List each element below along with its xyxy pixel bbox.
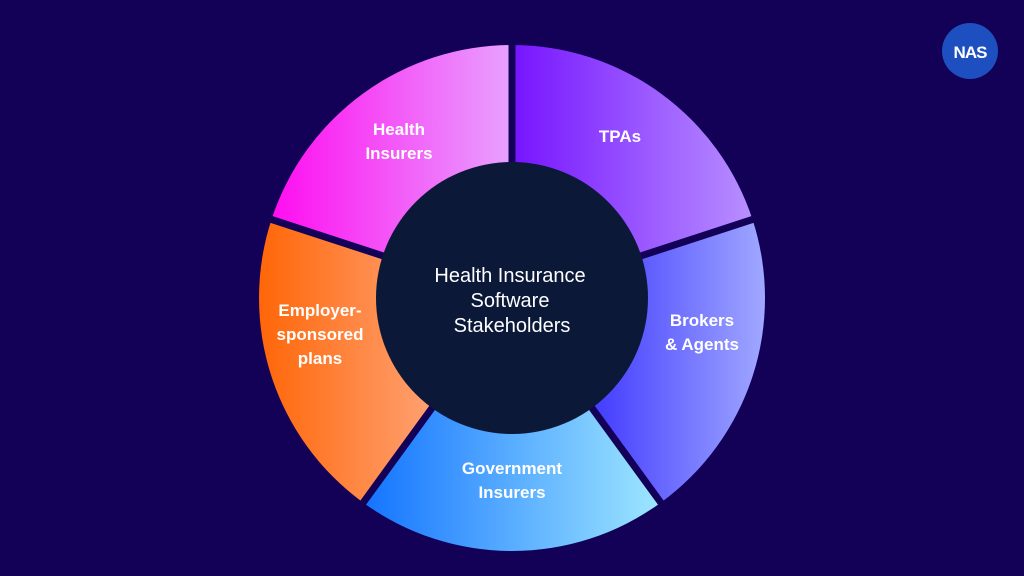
segment: Health Insurers: Insurers bbox=[365, 144, 433, 163]
segment: Brokers & Agents: & Agents bbox=[665, 335, 739, 354]
center circle title bbox=[376, 162, 648, 434]
segment: Employer-sponsored plans: Employer- bbox=[278, 301, 362, 320]
segment: Brokers & Agents: Brokers bbox=[670, 311, 734, 330]
center circle title: Stakeholders bbox=[454, 315, 570, 337]
center circle title: Software bbox=[471, 290, 549, 312]
segment: TPAs bbox=[512, 45, 753, 298]
segment: Employer-sponsored plans bbox=[259, 220, 512, 503]
segment: Government Insurers bbox=[363, 298, 661, 551]
segment: Health Insurers bbox=[271, 45, 512, 298]
segment: TPAs: TPAs bbox=[599, 127, 641, 146]
segment: Government Insurers: Insurers bbox=[478, 483, 546, 502]
logo: NAS bbox=[942, 23, 998, 79]
segment: Health Insurers: Health bbox=[373, 120, 425, 139]
donut chart bbox=[259, 40, 765, 551]
segment: Brokers & Agents bbox=[512, 220, 765, 503]
segment: Government Insurers: Government bbox=[462, 459, 562, 478]
segment: Employer-sponsored plans: plans bbox=[298, 349, 342, 368]
center circle title: Health Insurance bbox=[434, 265, 586, 287]
segment: Employer-sponsored plans: sponsored bbox=[277, 325, 363, 344]
logo: NAS: NAS bbox=[954, 43, 987, 62]
